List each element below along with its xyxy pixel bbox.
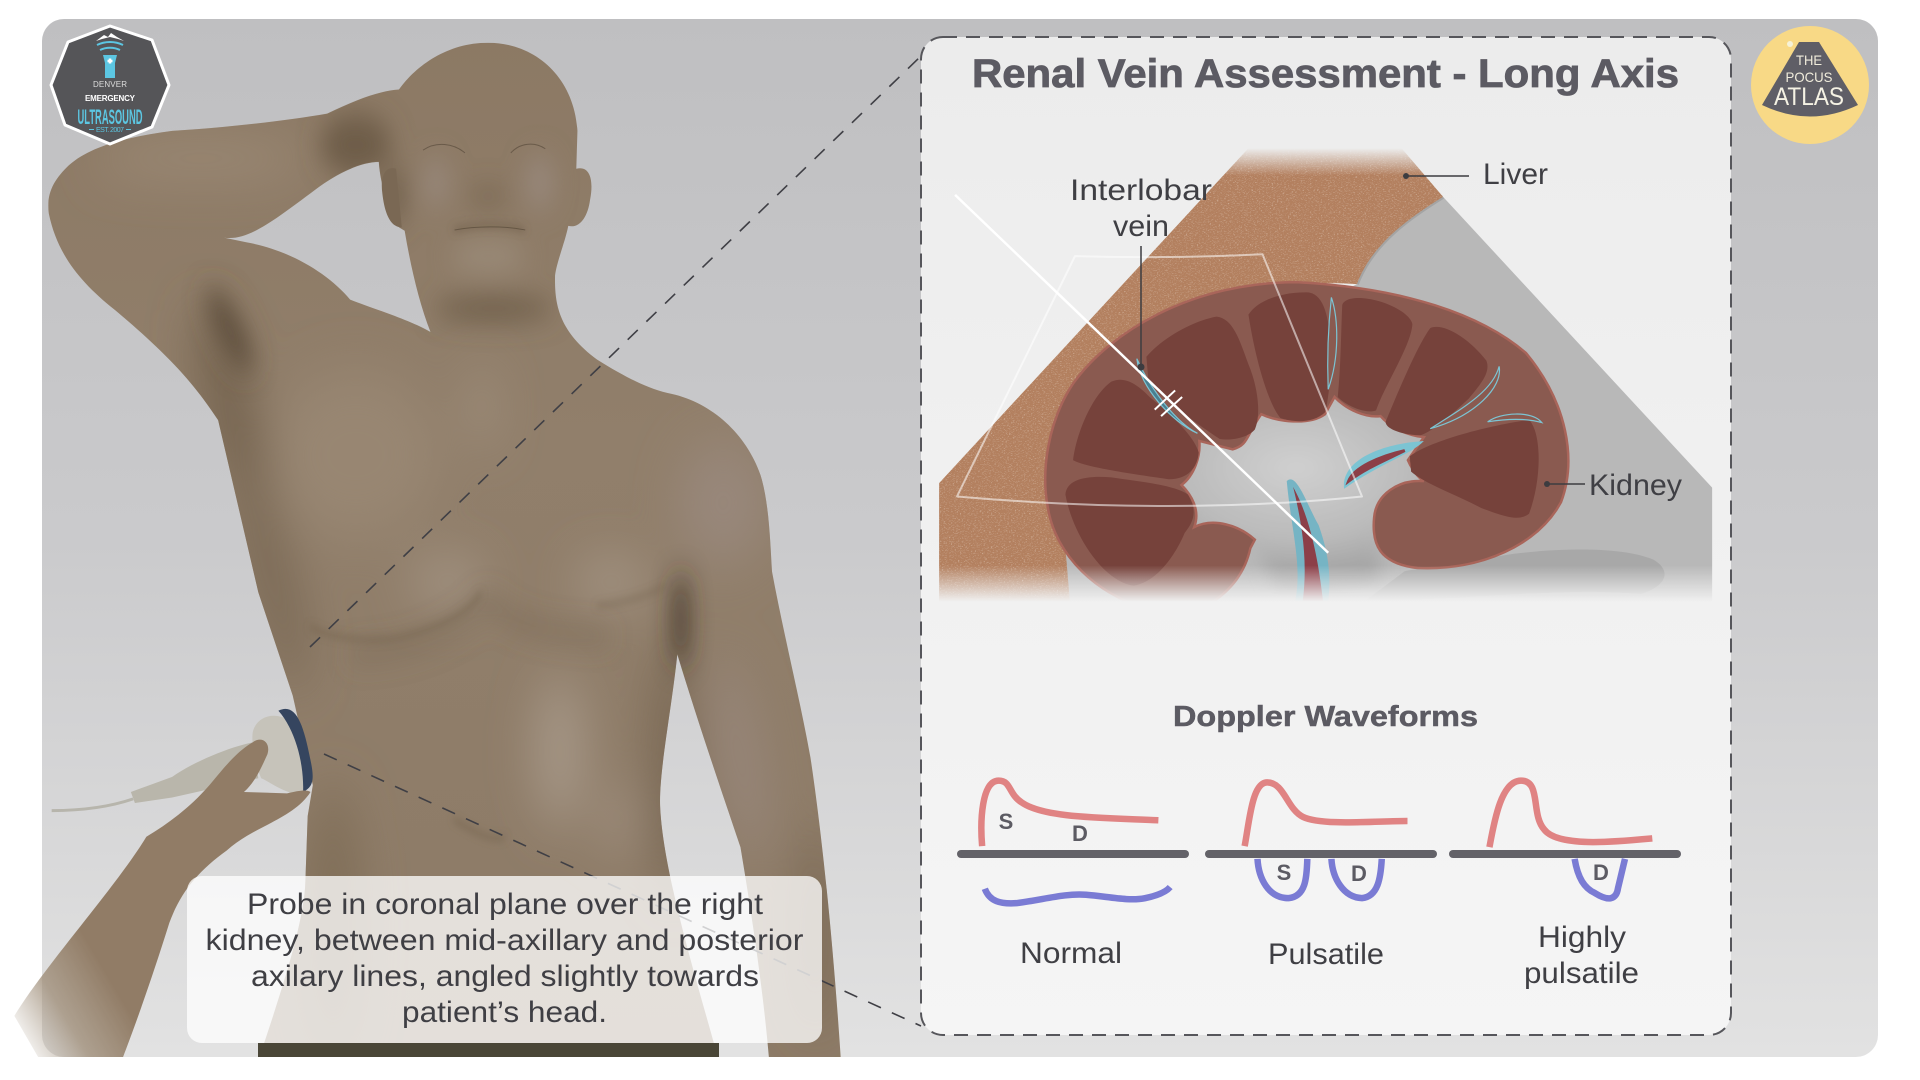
logo: Denver Emergency Ultrasound: DENVER — [93, 80, 127, 89]
operator hand and arm — [14, 740, 311, 1061]
waistband — [258, 1043, 719, 1057]
waveform: pulsatile: Pulsatile — [1268, 938, 1384, 971]
waveform: highly pulsatile: Highly — [1538, 921, 1626, 954]
waveform: highly pulsatile: D — [1593, 860, 1609, 885]
dashed connector: lower — [324, 754, 921, 1026]
panel: renal vein assessment — [921, 37, 1731, 1035]
label: Kidney — [1544, 469, 1682, 502]
logo: Denver Emergency Ultrasound: EMERGENCY — [85, 94, 136, 103]
label: Kidney: Kidney — [1589, 469, 1682, 502]
logo: The POCUS Atlas: ATLAS — [1774, 83, 1844, 111]
measurement line — [955, 195, 1328, 553]
torso and head — [34, 28, 867, 1061]
lower fascia — [1392, 550, 1664, 582]
dashed connector: upper — [310, 56, 921, 647]
gray tissue — [1057, 197, 1712, 602]
instruction text box: axilary lines, angled slightly towards — [251, 960, 759, 993]
waveform: pulsatile: S — [1277, 860, 1291, 885]
logo: The POCUS Atlas: THE — [1796, 52, 1822, 68]
kidney ultrasound diagram — [939, 148, 1712, 606]
title: Renal Vein Assessment - Long Axis — [972, 52, 1679, 96]
patient figure with probe — [14, 28, 867, 1061]
logo: Denver Emergency Ultrasound: ULTRASOUND — [78, 106, 142, 129]
instruction text box: kidney, between mid-axillary and posterior — [206, 924, 804, 957]
label: Interlobar vein — [1070, 174, 1212, 370]
left ear — [382, 180, 402, 227]
measurement ticks — [1155, 390, 1182, 416]
waveform: highly pulsatile — [1453, 781, 1677, 990]
renal vein branch — [1344, 441, 1424, 489]
waveform: normal: Normal — [1020, 937, 1122, 970]
instruction text box: Probe in coronal plane over the right — [247, 888, 764, 921]
pyramids — [1065, 292, 1539, 586]
waveform: normal — [961, 781, 1185, 970]
waveform: pulsatile: D — [1351, 861, 1367, 886]
logo: Denver Emergency Ultrasound — [51, 26, 169, 144]
kidney cortex — [1045, 282, 1568, 606]
waveform: highly pulsatile: pulsatile — [1524, 957, 1639, 990]
renal vein trunk — [1287, 479, 1329, 602]
heading: Doppler Waveforms: Doppler Waveforms — [1173, 701, 1478, 733]
waveform: normal: D — [1072, 821, 1088, 846]
logo: The POCUS Atlas — [1751, 26, 1869, 144]
label: Interlobar vein: vein — [1113, 210, 1169, 243]
instruction text box — [187, 876, 822, 1043]
logo: Denver Emergency Ultrasound: EST. 2007 — [96, 127, 124, 134]
label: Liver: Liver — [1483, 158, 1548, 191]
waveform: normal: S — [999, 809, 1013, 834]
renal sinus — [1212, 419, 1380, 584]
liver — [939, 148, 1443, 602]
logo: The POCUS Atlas: POCUS — [1786, 69, 1832, 85]
label: Interlobar vein: Interlobar — [1070, 174, 1212, 207]
veins — [1137, 297, 1542, 433]
waveform: pulsatile — [1209, 782, 1433, 971]
instruction text box: patient’s head. — [402, 996, 607, 1029]
probe — [52, 709, 313, 811]
face lines — [423, 144, 545, 230]
label: Liver — [1403, 158, 1548, 191]
ultrasound sector outline — [957, 254, 1362, 506]
